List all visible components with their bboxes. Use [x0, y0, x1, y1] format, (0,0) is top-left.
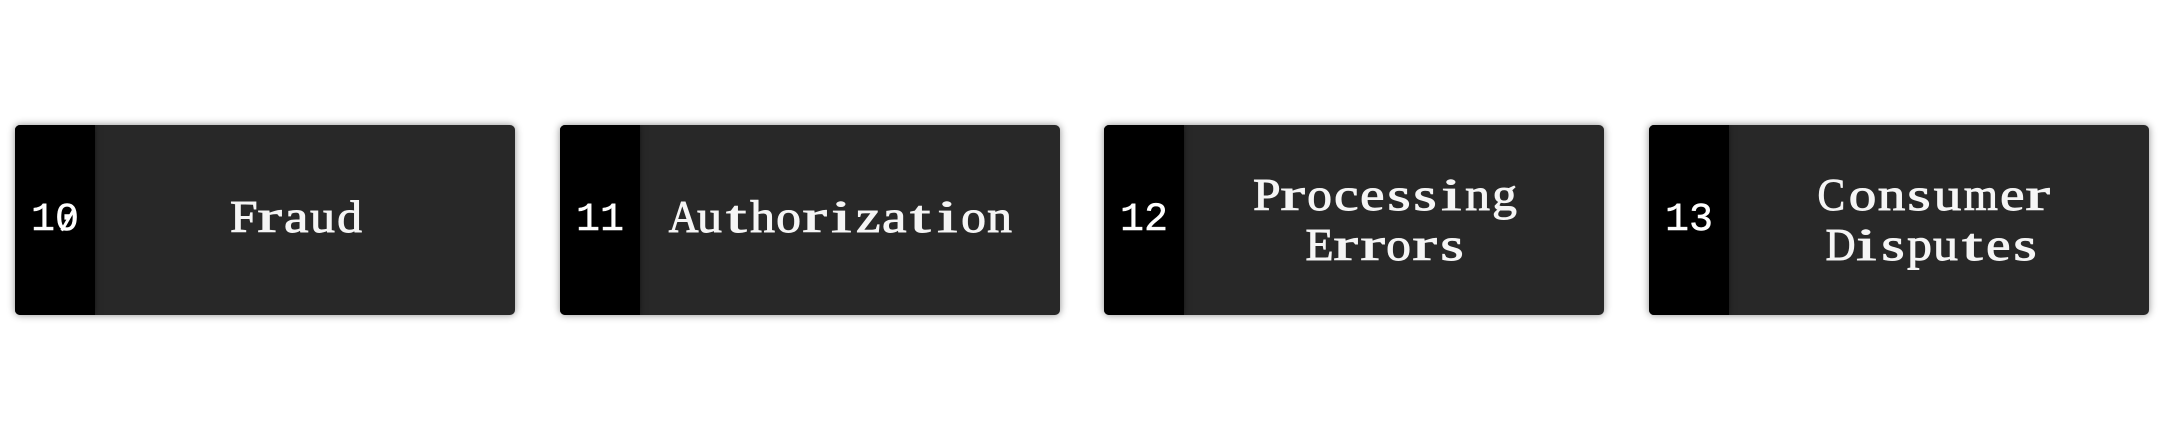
label: Processing Errors: g — [1492, 168, 1517, 220]
label: Authorization: o — [961, 191, 986, 242]
label: Authorization: i — [937, 191, 957, 242]
number badge 10: 10 — [31, 198, 79, 243]
label: Consumer Disputes: e — [2000, 168, 2024, 220]
label: Processing Errors: s — [1413, 168, 1437, 220]
label: Authorization: r — [803, 191, 827, 242]
label: Processing Errors: i — [1441, 168, 1462, 220]
label: Authorization: A — [668, 191, 698, 242]
label: Consumer Disputes: m — [1964, 168, 1997, 220]
label: Fraud — [230, 191, 362, 242]
label: Processing Errors: e — [1360, 168, 1385, 220]
label: Consumer Disputes: e — [1986, 218, 2011, 270]
number badge 11: 11 — [576, 198, 624, 243]
number badge 12: 12 — [1120, 198, 1168, 243]
label: Consumer Disputes: C — [1817, 168, 1845, 220]
label: Consumer Disputes — [1817, 168, 2050, 270]
number badge 13: 13 — [1665, 198, 1713, 243]
label: Processing Errors: r — [1413, 218, 1437, 270]
label: Fraud: d — [337, 191, 362, 242]
label: Consumer Disputes: n — [1877, 168, 1905, 220]
label: Consumer Disputes: D — [1825, 218, 1855, 270]
label: Authorization: i — [831, 191, 852, 242]
label: Processing Errors — [1253, 168, 1517, 270]
label: Processing Errors: o — [1307, 168, 1332, 220]
label: Processing Errors: s — [1387, 168, 1410, 220]
label: Authorization: t — [726, 191, 746, 242]
label: Consumer Disputes: i — [1856, 218, 1877, 270]
label: Authorization: n — [987, 191, 1012, 242]
label: Processing Errors: s — [1440, 218, 1463, 270]
card: Processing Errors — [1104, 125, 1604, 315]
number badge 11 — [560, 125, 640, 315]
label: Consumer Disputes: o — [1848, 168, 1876, 220]
label: Consumer Disputes: p — [1907, 218, 1932, 270]
label: Authorization: t — [910, 191, 931, 242]
label: Processing Errors: c — [1334, 168, 1358, 220]
label: Consumer Disputes: s — [1881, 218, 1905, 270]
label: Processing Errors: r — [1334, 218, 1358, 270]
label: Processing Errors: E — [1305, 218, 1334, 270]
label: Consumer Disputes: r — [2026, 168, 2050, 220]
label: Processing Errors: o — [1386, 218, 1411, 270]
label: Fraud: u — [310, 191, 335, 242]
label: Consumer Disputes: s — [2013, 218, 2036, 270]
number badge 10 — [15, 125, 95, 315]
card: Authorization — [560, 125, 1060, 315]
card: Consumer Disputes — [1649, 125, 2149, 315]
label: Processing Errors: r — [1281, 168, 1305, 220]
label: Authorization — [668, 191, 1012, 242]
label: Consumer Disputes: u — [1933, 218, 1958, 270]
label: Fraud: a — [284, 191, 309, 242]
card: Fraud — [15, 125, 515, 315]
number badge 12 — [1104, 125, 1184, 315]
label: Consumer Disputes: u — [1933, 168, 1961, 220]
label: Authorization: o — [776, 191, 801, 242]
label: Consumer Disputes: t — [1962, 218, 1982, 270]
label: Authorization: a — [882, 191, 907, 242]
label: Processing Errors: r — [1360, 218, 1385, 270]
label: Authorization: u — [697, 191, 722, 242]
label: Authorization: h — [750, 191, 775, 242]
label: Authorization: z — [856, 191, 880, 242]
label: Fraud: r — [258, 191, 282, 242]
label: Processing Errors: n — [1465, 168, 1490, 220]
label: Consumer Disputes: s — [1907, 168, 1931, 220]
label: Processing Errors: P — [1253, 168, 1281, 220]
label: Fraud: F — [230, 191, 258, 242]
number badge 13 — [1649, 125, 1729, 315]
